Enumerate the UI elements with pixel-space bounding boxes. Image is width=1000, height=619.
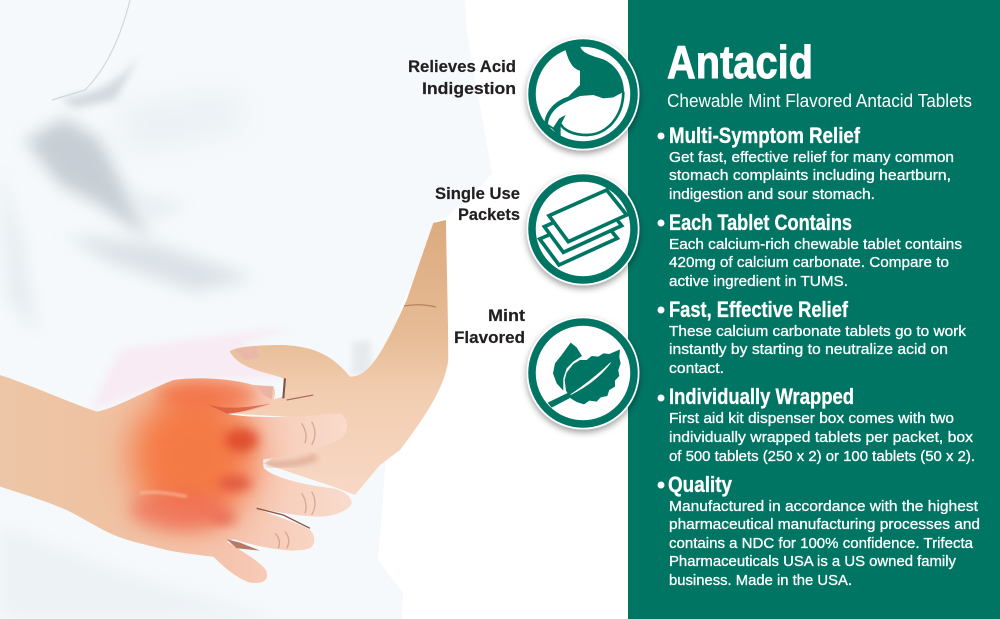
section: Each Tablet Contains: Each Tablet Contains	[669, 210, 852, 235]
back arm and hand	[227, 220, 448, 495]
section: Quality: contains a NDC for 100% confidence. Trifecta	[669, 535, 974, 552]
section: Individually Wrapped: First aid kit dispenser box comes with two	[669, 410, 954, 427]
section: Multi-Symptom Relief: stomach complaints including heartburn,	[669, 167, 951, 184]
feature label: Single Use Packets: Packets	[458, 205, 520, 224]
section: Each Tablet Contains: active ingredient in TUMS.	[669, 273, 848, 290]
section: Each Tablet Contains: 420mg of calcium carbonate. Compare to	[669, 254, 949, 271]
section: Multi-Symptom Relief: Multi-Symptom Relief	[669, 123, 861, 148]
photo: person holding stomach	[0, 0, 500, 619]
section: Quality: pharmaceutical manufacturing processes and	[669, 516, 980, 533]
section: Quality: Manufactured in accordance with the highest	[669, 498, 979, 515]
white t-shirt	[0, 0, 500, 619]
title: Antacid	[667, 36, 813, 88]
section: Quality	[658, 472, 980, 589]
section: Fast, Effective Relief	[658, 297, 966, 377]
section: Quality: business. Made in the USA.	[669, 572, 852, 589]
feature label: Relieves Acid Indigestion	[408, 57, 516, 98]
section: Each Tablet Contains	[658, 210, 962, 290]
elbow crease	[404, 305, 436, 307]
section: Fast, Effective Relief: contact.	[669, 360, 724, 377]
section: Individually Wrapped: individually wrapped tablets per packet, box	[669, 429, 974, 446]
feature label: Single Use Packets	[435, 184, 520, 224]
section: Multi-Symptom Relief	[658, 123, 954, 203]
feature label: Mint Flavored	[454, 306, 525, 347]
icon: stomach	[526, 38, 640, 150]
section: Fast, Effective Relief: Fast, Effective Relief	[669, 297, 849, 322]
section: Individually Wrapped: Individually Wrapped	[669, 384, 854, 409]
section: Individually Wrapped: of 500 tablets (250 x 2) or 100 tablets (50 x 2).	[669, 448, 975, 465]
feature label: Relieves Acid Indigestion: Relieves Acid	[408, 57, 516, 76]
teal product panel background	[628, 0, 1000, 619]
section: Multi-Symptom Relief: Get fast, effective relief for many common	[669, 149, 954, 166]
feature label: Mint Flavored: Mint	[488, 306, 525, 325]
section: Multi-Symptom Relief: indigestion and sour stomach.	[669, 186, 875, 203]
section: Quality: Quality	[668, 472, 733, 497]
front arm and hand with red inflammation	[0, 375, 352, 583]
feature label: Relieves Acid Indigestion: Indigestion	[422, 79, 516, 98]
icon: mint leaf	[526, 316, 640, 430]
section: Fast, Effective Relief: These calcium carbonate tablets go to work	[669, 323, 966, 340]
subtitle: Chewable Mint Flavored Antacid Tablets	[667, 90, 972, 111]
icon: packets	[526, 172, 640, 286]
feature label: Mint Flavored: Flavored	[454, 328, 525, 347]
section: Fast, Effective Relief: instantly by starting to neutralize acid on	[669, 341, 948, 358]
section: Quality: Pharmaceuticals USA is a US owned family	[669, 553, 956, 570]
feature label: Single Use Packets: Single Use	[435, 184, 520, 203]
section: Each Tablet Contains: Each calcium-rich chewable tablet contains	[669, 236, 962, 253]
section: Individually Wrapped	[658, 384, 975, 465]
back hand nail and finger crease	[235, 346, 317, 464]
